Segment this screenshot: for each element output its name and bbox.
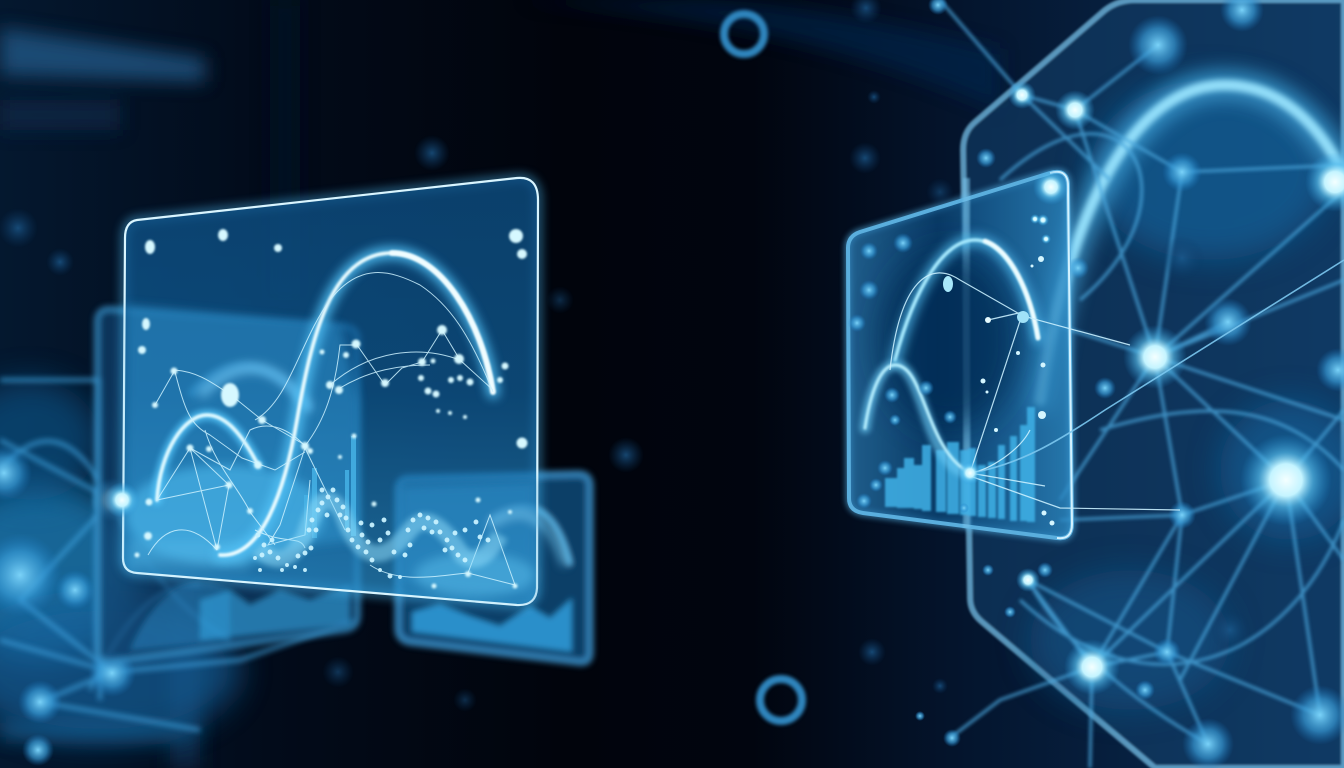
network links xyxy=(940,0,1344,768)
bar chart in main panel xyxy=(304,436,356,538)
main glass panel xyxy=(104,178,565,605)
blurred back panel left xyxy=(97,309,358,662)
network nodes xyxy=(976,0,1344,768)
right glass panel xyxy=(848,169,1344,538)
panel outer glow xyxy=(123,178,538,605)
main glowing curve xyxy=(157,253,493,555)
panel body xyxy=(848,172,1072,538)
big blurred arc xyxy=(1040,85,1344,400)
floating bokeh dots xyxy=(322,0,961,747)
ring top centre xyxy=(724,14,764,54)
blurred background architecture xyxy=(0,0,1000,768)
ghosted panel behind the glass xyxy=(125,305,565,600)
blurred network bottom left xyxy=(0,208,355,766)
data nodes main panel xyxy=(134,229,528,588)
right panel curves xyxy=(865,240,1038,473)
scatter dots xyxy=(254,488,490,578)
large hexagonal network panel xyxy=(940,0,1344,768)
hexagon inner haze xyxy=(1030,80,1344,710)
bar chart right panel xyxy=(885,407,1035,522)
ring bottom centre xyxy=(760,679,802,721)
hexagon edge seen through glass xyxy=(963,178,970,528)
right panel nodes xyxy=(848,169,1069,526)
clustered scatter plot xyxy=(254,488,500,578)
panel body xyxy=(123,178,538,605)
right panel thin lines xyxy=(890,260,1344,510)
blurred back panel centre xyxy=(398,474,590,662)
left edge flare xyxy=(104,482,140,518)
dark centre of panel xyxy=(880,250,1020,430)
panel outer glow xyxy=(848,172,1072,538)
scatter glow band xyxy=(258,500,500,560)
thin connecting lines xyxy=(148,273,515,585)
panel sharp right edge xyxy=(1050,172,1072,538)
